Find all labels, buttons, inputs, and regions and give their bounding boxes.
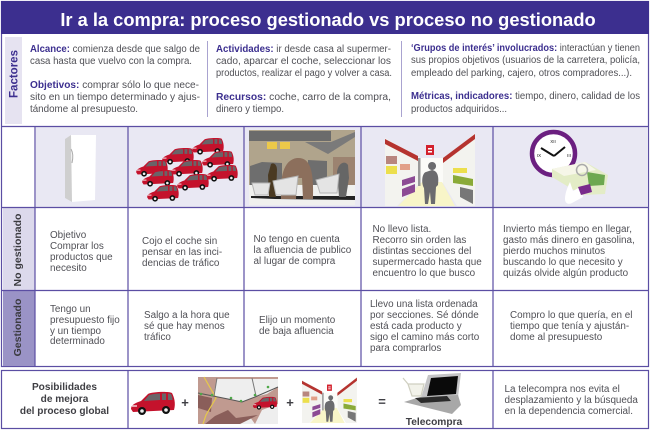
row: no gestionado xyxy=(50,224,635,279)
text block: scope and objectives: Objetivos: comprar sólo lo que nece- xyxy=(30,80,199,91)
heading: posibilidades de mejora: Posibilidades xyxy=(32,382,97,393)
cell: list: No llevo lista. xyxy=(372,224,431,235)
image: supermarket aisle with shopper xyxy=(385,133,475,206)
text block: stakeholders and metrics: ‘Grupos de interés’ involucrados: interactúan y tienen xyxy=(411,43,640,54)
cell: car xyxy=(142,236,222,269)
icon: clock with money and thumbs up xyxy=(532,132,608,204)
cell: objective: Comprar los xyxy=(50,241,104,252)
label: telecompra: Telecompra xyxy=(406,417,463,428)
text block: activities and resources: Recursos: coche, carro de la compra, xyxy=(216,92,391,103)
cell: budget: y un tiempo xyxy=(50,326,102,337)
cell: objective: Objetivo xyxy=(50,230,87,241)
image: aisle xyxy=(302,377,357,423)
plus: + xyxy=(181,395,189,410)
cell: objective: necesito xyxy=(50,263,87,274)
row label: gestionado: Gestionado xyxy=(12,299,24,356)
text block: stakeholders and metrics xyxy=(411,43,640,115)
row: gestionado xyxy=(50,299,632,354)
factors label xyxy=(5,37,22,124)
cell: car: dencias de tráfico xyxy=(142,258,220,269)
cell: budget: presupuesto fijo xyxy=(50,315,120,326)
title banner: Ir a la compra: proceso gestionado vs proceso no gestionado xyxy=(60,9,596,30)
table grid xyxy=(1,126,649,366)
text block: activities and resources: productos, realizar el pago y volver a casa. xyxy=(216,68,392,79)
cell: result: Compro lo que quería, en el xyxy=(510,310,632,321)
text block: scope and objectives: casa hasta que vuelvo con la compra. xyxy=(30,56,192,67)
cell: low crowd: Elijo un momento xyxy=(259,315,336,326)
panel: improvement possibilities xyxy=(2,370,648,428)
cell: list: supermercado hasta que xyxy=(372,257,482,268)
text block: activities and resources xyxy=(216,44,392,115)
panel: image row xyxy=(36,127,648,207)
cell: list: Recorro sin orden las xyxy=(372,235,466,246)
text block: stakeholders and metrics: empleado del parking, cajero, otros compradores...). xyxy=(411,68,632,79)
text block: scope and objectives: Alcance: comienza desde que salgo de xyxy=(30,44,200,55)
cell: departure time: tráfico xyxy=(144,332,171,343)
cell: ordered list xyxy=(370,299,480,354)
image: crowded supermarket with carts xyxy=(249,130,355,205)
icon: fridge xyxy=(65,135,96,202)
text block: activities and resources: dinero y tiempo. xyxy=(216,104,284,115)
cell: budget xyxy=(50,304,120,347)
cell: list: encuentro lo que busco xyxy=(372,268,476,279)
cell: outcome: gasto más dinero en gasolina, xyxy=(503,235,635,246)
cell: result xyxy=(510,310,632,343)
panel: factors xyxy=(5,37,640,124)
cell: departure time xyxy=(144,310,230,343)
text block: scope and objectives: sito en un tiempo determinado y ajus- xyxy=(30,92,200,103)
factors label: Factores xyxy=(8,50,20,98)
cell: car: pensar en las inci- xyxy=(142,247,222,258)
text block: telecompra benefit: desplazamiento y la búsqueda xyxy=(504,395,638,406)
icon: clock with money and thumbs up: III xyxy=(567,153,571,158)
cell: objective xyxy=(50,230,113,274)
row label: no gestionado: No gestionado xyxy=(12,214,24,286)
text block: stakeholders and metrics: Métricas, indicadores: tiempo, dinero, calidad de los xyxy=(411,91,640,102)
cell: crowd xyxy=(254,234,352,267)
cell: ordered list: Llevo una lista ordenada xyxy=(370,299,478,310)
equals: = xyxy=(378,394,386,409)
cell: objective: productos que xyxy=(50,252,113,263)
text block: activities and resources: cado, aparcar el coche, seleccionar los xyxy=(216,56,391,67)
text block: stakeholders and metrics: productos adquiridos... xyxy=(411,104,507,115)
cell: result: dome al presupuesto xyxy=(510,332,603,343)
icon: clock with money and thumbs up: XII xyxy=(550,139,556,144)
cell: outcome xyxy=(503,224,635,279)
plus: + xyxy=(286,395,294,410)
title banner xyxy=(1,1,649,34)
cell: crowd: No tengo en cuenta xyxy=(254,234,340,245)
cell: budget: determinado xyxy=(50,336,105,347)
text block: telecompra benefit: La telecompra nos evita el xyxy=(504,384,620,395)
icon: traffic of red cars xyxy=(136,138,238,202)
cell: departure time: sé que hay menos xyxy=(144,321,225,332)
row label: gestionado xyxy=(3,291,35,366)
cell: low crowd: de baja afluencia xyxy=(259,326,334,337)
cell: departure time: Salgo a la hora que xyxy=(144,310,230,321)
cell: list: distintas secciones del xyxy=(372,246,471,257)
cell: outcome: pierdo muchos minutos xyxy=(503,246,605,257)
cell: car: Cojo el coche sin xyxy=(142,236,217,247)
text block: stakeholders and metrics: sus propios objetivos (usuarios de la carretera, policía, xyxy=(411,55,640,66)
cell: result: tiempo que tenía y ajustán- xyxy=(510,321,629,332)
cell: outcome: Invierto más tiempo en llegar, xyxy=(503,224,632,235)
text block: activities and resources: Actividades: ir desde casa al supermer- xyxy=(216,44,391,55)
heading: posibilidades de mejora: de mejora xyxy=(41,394,89,405)
text block: telecompra benefit: en la dependencia comercial. xyxy=(504,406,633,417)
text block: telecompra benefit xyxy=(504,384,638,417)
heading: posibilidades de mejora xyxy=(20,382,109,417)
cell: low crowd xyxy=(259,315,336,337)
heading: posibilidades de mejora: del proceso global xyxy=(20,406,109,417)
cell: ordered list: por secciones. Sé dónde xyxy=(370,310,479,321)
cell: list xyxy=(372,224,482,279)
cell: ordered list: sigo el camino más corto xyxy=(370,332,480,343)
cell: crowd: al lugar de compra xyxy=(254,256,336,267)
cell: ordered list: para comprarlos xyxy=(370,343,441,354)
cell: outcome: quizás olvide algún producto xyxy=(503,268,629,279)
cell: crowd: la afluencia de publico xyxy=(254,245,352,256)
text block: scope and objectives xyxy=(30,44,200,115)
icon: car xyxy=(131,392,175,415)
cell: outcome: buscando lo que necesito y xyxy=(503,257,623,268)
image: traffic map xyxy=(198,377,278,424)
cell: budget: Tengo un xyxy=(50,304,91,315)
text block: scope and objectives: tándome al presupuesto. xyxy=(30,104,138,115)
icon: laptop with cart xyxy=(403,373,461,414)
cell: ordered list: está cada producto y xyxy=(370,321,462,332)
row label: no gestionado xyxy=(3,208,35,291)
icon: clock with money and thumbs up: IX xyxy=(537,153,541,158)
